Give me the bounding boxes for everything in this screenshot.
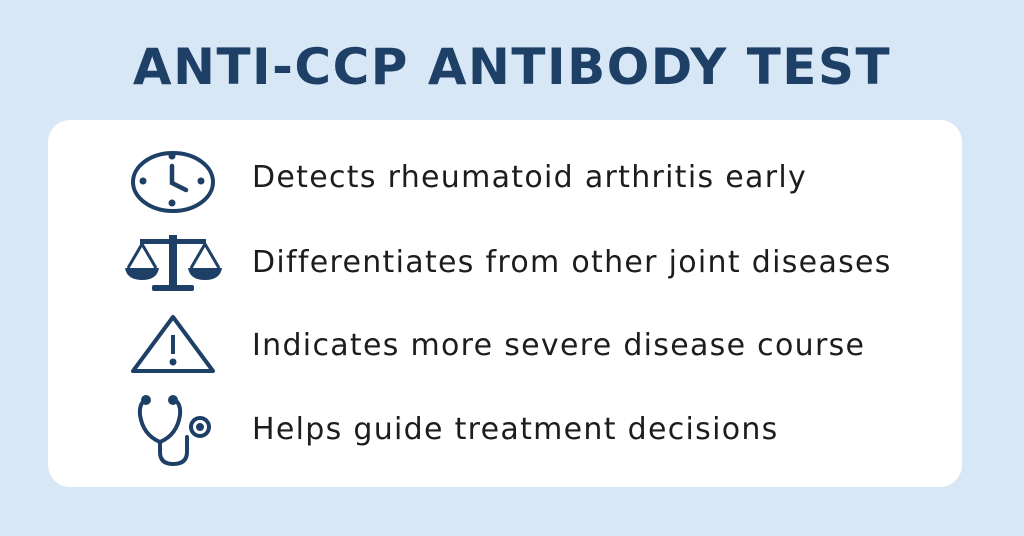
icon: stethoscope (140, 397, 209, 464)
icon: warning triangle (133, 317, 213, 371)
icon: scale (125, 235, 222, 291)
panel: benefits list (48, 120, 962, 487)
text: item 3: Indicates more severe disease course (252, 328, 865, 363)
title: ANTI-CCP ANTIBODY TEST (133, 38, 891, 96)
icon: clock (133, 153, 213, 211)
text: item 4: Helps guide treatment decisions (252, 412, 779, 447)
text: item 2: Differentiates from other joint diseases (252, 245, 892, 280)
text: item 1: Detects rheumatoid arthritis early (252, 160, 807, 195)
